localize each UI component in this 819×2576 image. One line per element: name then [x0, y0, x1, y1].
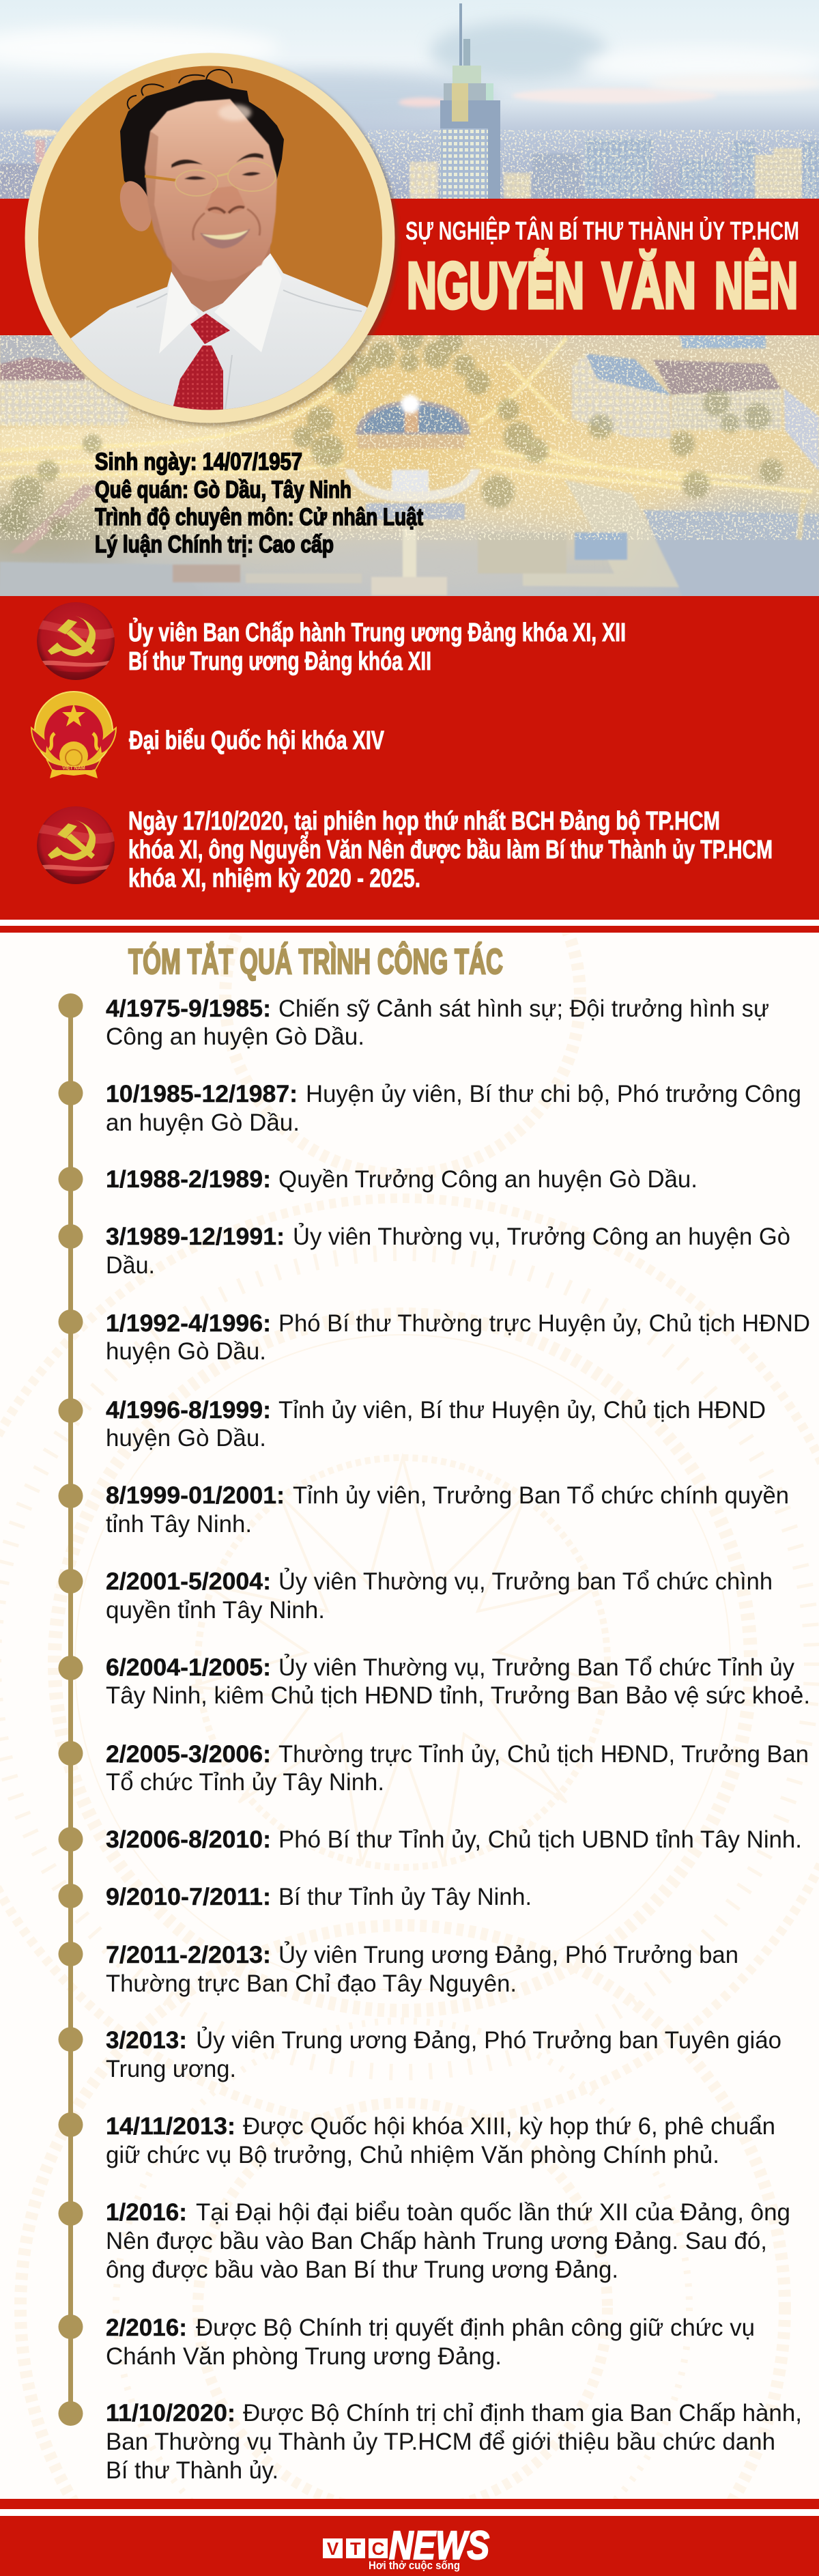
shirt [71, 253, 367, 410]
item 8: Ủy viên Thường vụ, Trưởng ban Tổ chức chình [278, 1568, 773, 1595]
icon: national emblem [31, 692, 116, 778]
item 7: tỉnh Tây Ninh. [106, 1511, 252, 1538]
personal details: Trình độ chuyên môn: Cử nhân Luật [95, 504, 423, 530]
item 2: 10/1985-12/1987: [106, 1081, 298, 1107]
item 17: 2/2016: [106, 2315, 187, 2341]
position text 3: khóa XI, nhiệm kỳ 2020 - 2025. [128, 864, 420, 893]
item 9: Tây Ninh, kiêm Chủ tịch HĐND tỉnh, Trưởng Ban Bảo vệ sức khoẻ. [106, 1682, 810, 1709]
item 1: Chiến sỹ Cảnh sát hình sự; Đội trưởng hình sự [278, 995, 769, 1022]
title band [0, 199, 819, 335]
item 15: 14/11/2013: [106, 2113, 235, 2140]
item 12 [59, 1884, 532, 1910]
item 6: Tỉnh ủy viên, Bí thư Huyện ủy, Chủ tịch HĐND [278, 1397, 766, 1424]
drum pattern background [0, 933, 819, 2499]
icon: national emblem: VIỆT NAM [62, 765, 85, 771]
item 9 [59, 1654, 810, 1709]
eyes [184, 172, 261, 180]
item 10: Thường trực Tỉnh ủy, Chủ tịch HĐND, Trưởng Ban [278, 1741, 809, 1768]
tie [190, 313, 230, 344]
personal details: Sinh ngày: 14/07/1957 [95, 449, 302, 475]
item 3 [59, 1166, 698, 1193]
item 17: Chánh Văn phòng Trung ương Đảng. [106, 2343, 502, 2370]
item 15: giữ chức vụ Bộ trưởng, Chủ nhiệm Văn phòng Chính phủ. [106, 2142, 719, 2168]
nose [205, 186, 246, 214]
item 8: 2/2001-5/2004: [106, 1568, 271, 1595]
item 6: huyện Gò Dầu. [106, 1425, 266, 1452]
personal details [95, 449, 423, 558]
position text 3 [128, 807, 773, 893]
item 4: Dầu. [106, 1252, 155, 1279]
item 18: Được Bộ Chính trị chỉ định tham gia Ban Chấp hành, [243, 2400, 802, 2426]
item 4: 3/1989-12/1991: [106, 1223, 285, 1250]
speckled lights [0, 335, 819, 540]
item 13 [59, 1941, 738, 1997]
medallion ring [25, 53, 394, 423]
item 7 [59, 1482, 789, 1538]
light trails [0, 338, 812, 492]
icon: party flag [37, 602, 115, 682]
red divider stripe [0, 926, 819, 933]
trees [0, 324, 784, 535]
item 6 [59, 1397, 766, 1452]
item 4: Ủy viên Thường vụ, Trưởng Công an huyện Gò [293, 1223, 790, 1250]
item 8 [59, 1568, 773, 1624]
background photo: Ho Chi Minh City skyline [0, 0, 819, 608]
item 16: Nên được bầu vào Ban Chấp hành Trung ương Đảng. Sau đó, [106, 2228, 767, 2254]
item 18: Bí thư Thành ủy. [106, 2457, 278, 2484]
item 7: 8/1999-01/2001: [106, 1482, 285, 1509]
item 1: Công an huyện Gò Dầu. [106, 1023, 364, 1050]
item 18: 11/10/2020: [106, 2400, 235, 2426]
item 14: Trung ương. [106, 2056, 236, 2082]
icon: party flag [37, 806, 115, 886]
item 10: 2/2005-3/2006: [106, 1741, 271, 1768]
timeline [59, 993, 810, 2484]
item 1 [59, 993, 769, 1050]
item 1: 4/1975-9/1985: [106, 995, 271, 1022]
face [145, 99, 277, 281]
item 5: 1/1992-4/1996: [106, 1310, 271, 1337]
item 11: 3/2006-8/2010: [106, 1826, 271, 1853]
item 3: Quyền Trưởng Công an huyện Gò Dầu. [278, 1166, 698, 1193]
item 14: 3/2013: [106, 2027, 187, 2054]
ground base [0, 335, 819, 596]
item 9: Ủy viên Thường vụ, Trưởng Ban Tổ chức Tỉnh ủy [278, 1654, 794, 1681]
personal details: Lý luận Chính trị: Cao cấp [95, 531, 334, 558]
item 7: Tỉnh ủy viên, Trưởng Ban Tổ chức chính quyền [293, 1482, 789, 1509]
logo: VTC News: Hơi thở cuộc sống [369, 2559, 460, 2572]
item 18: Ban Thường vụ Thành ủy TP.HCM để giới thiệu bầu chức danh [106, 2429, 775, 2455]
item 16: ông được bầu vào Ban Bí thư Trung ương Đảng. [106, 2256, 618, 2283]
item 10 [59, 1741, 809, 1796]
item 18 [59, 2400, 802, 2484]
item 5 [59, 1310, 810, 1365]
collar [159, 272, 199, 354]
portrait medallion [25, 53, 398, 426]
logo: VTC News: V [327, 2538, 339, 2559]
name heading: VĂN [602, 249, 696, 322]
item 10: Tổ chức Tỉnh ủy Tây Ninh. [106, 1769, 384, 1796]
item 12: Bí thư Tỉnh ủy Tây Ninh. [278, 1884, 532, 1910]
city lights far [0, 130, 819, 199]
personal details: Quê quán: Gò Dầu, Tây Ninh [95, 477, 351, 503]
right buildings [679, 335, 766, 348]
item 2: Huyện ủy viên, Bí thư chi bộ, Phó trưởng Công [306, 1081, 801, 1107]
ear [120, 181, 152, 231]
panel: positions [0, 596, 819, 920]
item 16: Tại Đại hội đại biểu toàn quốc lần thứ XII của Đảng, ông [196, 2199, 790, 2226]
item 13: 7/2011-2/2013: [106, 1942, 271, 1968]
item 14 [59, 2026, 781, 2082]
water [643, 510, 819, 596]
item 2 [59, 1081, 801, 1136]
item 12: 9/2010-7/2011: [106, 1884, 271, 1910]
footer [0, 2499, 819, 2576]
item 5: Phó Bí thư Thường trực Huyện ủy, Chủ tịch HĐND [278, 1310, 810, 1337]
timeline line [68, 1006, 73, 2414]
position text 1 [128, 617, 626, 676]
item 14: Ủy viên Trung ương Đảng, Phó Trưởng ban Tuyên giáo [196, 2026, 781, 2054]
mouth [200, 229, 250, 249]
eyebrows [171, 153, 263, 168]
item 13: Thường trực Ban Chỉ đạo Tây Nguyên. [106, 1970, 517, 1997]
item 16: 1/2016: [106, 2199, 187, 2226]
sky [0, 0, 819, 199]
item 2: an huyện Gò Dầu. [106, 1109, 300, 1136]
section heading: TÓM TẮT QUÁ TRÌNH CÔNG TÁC [128, 942, 503, 982]
item 15 [59, 2112, 775, 2168]
item 15: Được Quốc hội khóa XIII, kỳ họp thứ 6, phê chuẩn [243, 2113, 775, 2140]
logo: VTC News: T [350, 2538, 361, 2559]
glasses [145, 161, 276, 196]
item 4 [59, 1223, 790, 1279]
item 6: 4/1996-8/1999: [106, 1397, 271, 1424]
piers [523, 480, 679, 587]
medallion shadow [28, 56, 398, 426]
position text 1: Ủy viên Ban Chấp hành Trung ương Đảng khóa XI, XII [128, 617, 626, 647]
name heading: NGUYỄN [407, 249, 584, 322]
portrait photo [34, 61, 389, 416]
neck [172, 244, 270, 312]
left buildings [0, 335, 89, 364]
item 13: Ủy viên Trung ương Đảng, Phó Trưởng ban [278, 1941, 738, 1968]
logo: VTC News [323, 2523, 489, 2572]
item 11: Phó Bí thư Tỉnh ủy, Chủ tịch UBND tỉnh Tây Ninh. [278, 1826, 802, 1853]
logo: VTC News: C [372, 2538, 385, 2559]
item 17: Được Bộ Chính trị quyết định phân công giữ chức vụ [196, 2315, 755, 2341]
item 17 [59, 2315, 755, 2370]
hair [120, 79, 284, 205]
item 8: quyền tỉnh Tây Ninh. [106, 1597, 325, 1624]
logo: VTC News: NEWS [389, 2523, 489, 2568]
position text 1: Bí thư Trung ương Đảng khóa XII [128, 647, 431, 676]
position text 2: Đại biểu Quốc hội khóa XIV [129, 726, 384, 755]
item 3: 1/1988-2/1989: [106, 1166, 271, 1193]
item 9: 6/2004-1/2005: [106, 1654, 271, 1681]
item 16 [59, 2199, 790, 2283]
item 5: huyện Gò Dầu. [106, 1338, 266, 1365]
monument [356, 401, 470, 435]
tower [440, 3, 500, 199]
smile folds [193, 209, 260, 240]
